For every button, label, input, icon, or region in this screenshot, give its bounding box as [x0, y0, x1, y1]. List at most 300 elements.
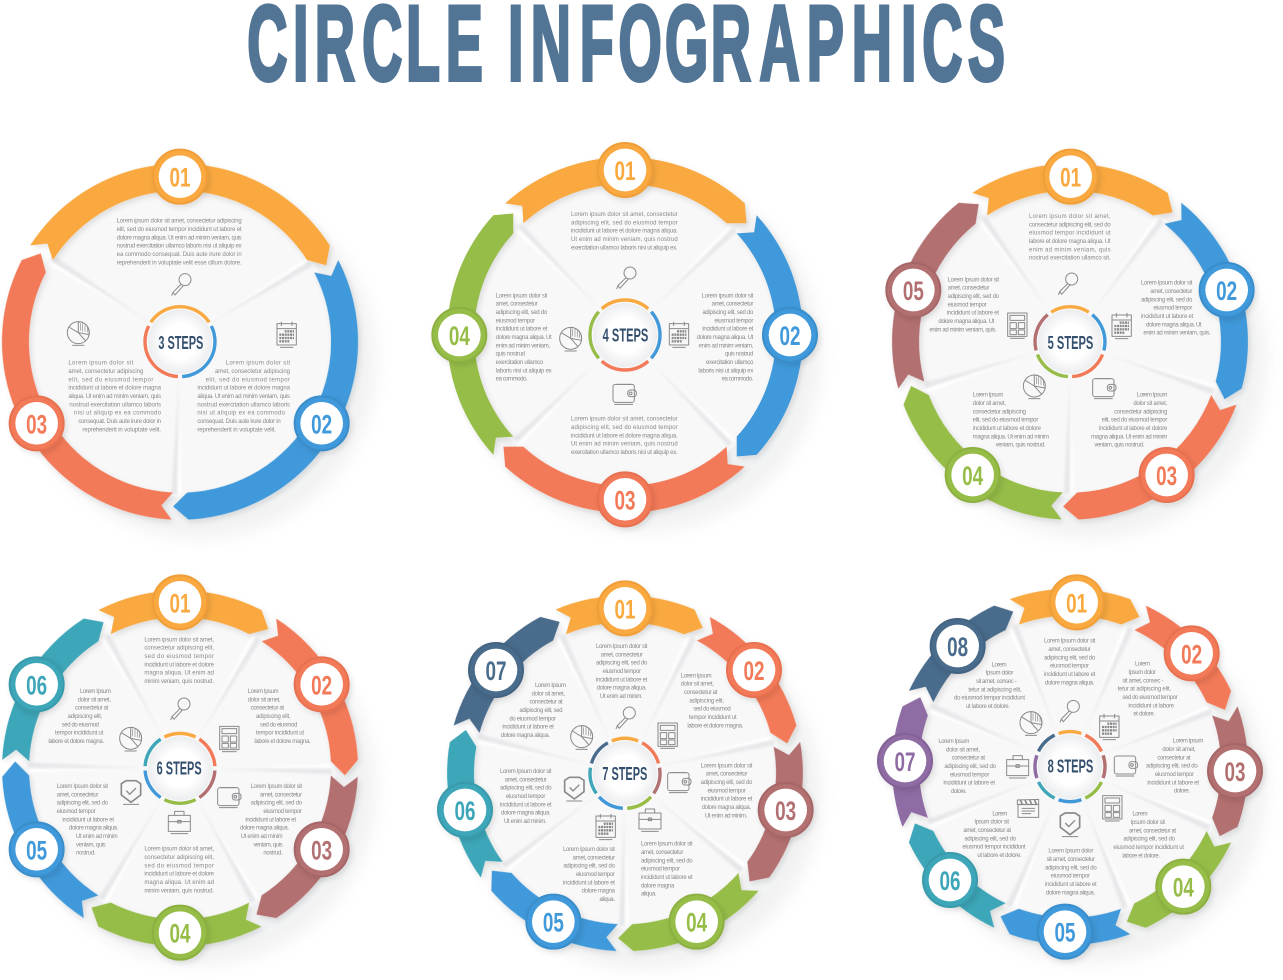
body text: step 02: eiusmod tempor	[714, 318, 753, 324]
body text: step 03: nostrud exercitation ullamco laboris	[69, 402, 161, 408]
badge 04: 04	[169, 919, 191, 949]
body text: step 07: incididunt ut labore et	[943, 781, 995, 787]
body text: step 02	[248, 689, 311, 745]
panel: 3 steps circle	[0, 150, 409, 560]
body text: step 04: adipiscing elit, sed do	[496, 310, 548, 316]
body text: step 07: dolor sit amet,	[532, 691, 565, 697]
body text: step 01: eiusmod tempor	[1050, 664, 1089, 670]
arrow segment 03	[503, 447, 745, 513]
icon: calendar	[1112, 313, 1131, 339]
body text: step 08: ut labore et dolore.	[966, 704, 1010, 710]
center hub: 7 steps	[588, 738, 662, 811]
body text: step 06: sed do eiusmod	[62, 722, 99, 728]
badge 04: 04	[962, 461, 983, 491]
center hub: 7 steps: 7 STEPS	[602, 763, 647, 784]
badge 02	[1200, 263, 1254, 317]
body text: step 02: elit, sed do eiusmod tempor	[206, 377, 290, 383]
arrow segment 03	[743, 737, 814, 889]
badge 02	[295, 396, 349, 450]
body text: step 02: labore et dolore magna.	[687, 723, 744, 729]
body text: step 03: incididunt ut labore et	[1147, 780, 1199, 786]
body text: step 07: adipiscing elit, sed do	[944, 764, 997, 770]
body text: step 08: Ipsum dolor	[986, 671, 1013, 677]
body text: step 07: consectetur at	[529, 700, 563, 706]
body text: step 06: consectetur at	[75, 706, 109, 712]
body text: step 06: dolore magna aliqua.	[501, 811, 551, 817]
badge 02: 02	[311, 409, 332, 439]
body text: step 02: exercitation ullamco	[706, 360, 754, 366]
badge 03	[10, 396, 64, 450]
number badges	[438, 581, 813, 949]
body text: step 03: elit, sed do eiusmod tempor	[68, 377, 153, 383]
badge 03	[1208, 744, 1262, 798]
icon: pie chart	[571, 726, 593, 749]
body text: step 02: sed do eiusmod	[260, 722, 297, 728]
arrow segment 03	[1212, 706, 1248, 836]
arrow segment 02	[171, 250, 409, 560]
body text: step 04: eiusmod tempor	[496, 318, 535, 324]
body text: step 04: laboris nisi ut aliquip ex	[496, 368, 552, 374]
body text: step 03: eiusmod tempor	[1155, 772, 1194, 778]
badge 01: 01	[169, 588, 191, 618]
body text: step 01: amet, consectetur	[1048, 647, 1091, 653]
body text: step 07	[501, 683, 566, 739]
arrow segment 07	[443, 602, 565, 741]
body text: step 03: reprehenderit in voluptate velit.	[82, 427, 161, 433]
center hub: 8 steps: 8 STEPS	[1048, 755, 1093, 776]
body text: step 01	[117, 219, 242, 266]
body text: step 04: amet, consectetur	[641, 850, 683, 856]
body text: step 03: amet, consectetur	[260, 792, 302, 798]
badge 01	[153, 150, 207, 204]
body text: step 02: tempor incididunt ut	[256, 731, 304, 737]
body text: step 05: adipiscing elit, sed do	[948, 294, 1000, 300]
body text: step 01: amet, consectetur	[601, 652, 643, 658]
badge 02	[295, 657, 349, 711]
body text: step 01: Ut enim ad minim.	[600, 694, 643, 700]
body text: step 06: Lorem	[992, 811, 1007, 817]
body text: step 06: tempor incididunt ut	[55, 731, 104, 737]
ring segments	[434, 595, 814, 967]
body text: step 05: Lorem Ipsum dolor sit	[57, 784, 108, 790]
body text: step 02: et dolore.	[1133, 712, 1155, 718]
arrow segment 01	[505, 157, 746, 223]
badge 03: 03	[614, 485, 635, 515]
arrow segment 04	[1121, 825, 1239, 942]
body text: step 01: reprehenderit in voluptate velit esse cillum dolore.	[117, 260, 242, 266]
body text: step 01: nostrud exercitation ullamco laboris nisi ut aliquip ex	[117, 244, 242, 250]
body text: step 01: Lorem Ipsum dolor sit	[596, 644, 648, 650]
body text: step 03: amet, consectetur adipiscing	[68, 369, 143, 375]
body text: step 03: magna aliqua. Ut enim ad minim	[1091, 434, 1167, 440]
body text: step 02: incididunt ut labore et dolore magna	[197, 386, 291, 392]
body text: step 06: incididunt ut labore et	[500, 802, 552, 808]
arrow segment 02	[1160, 194, 1271, 400]
badge 05: 05	[543, 908, 564, 938]
panel: 7 steps circle	[434, 581, 822, 970]
badge 03	[598, 472, 652, 526]
body text: step 04: elit, sed do eiusmod tempor	[973, 418, 1038, 424]
badge 01: 01	[169, 163, 191, 193]
arrow segment 04	[882, 384, 1075, 543]
badge 04	[432, 308, 486, 362]
icon: shield	[1060, 813, 1080, 837]
badge 07	[469, 643, 523, 697]
body text: step 01: magna aliqua. Ut enim ad	[144, 671, 214, 677]
arrow segment 06	[0, 603, 108, 772]
body text: step 05: amet, consectetur	[948, 286, 989, 292]
body text: step 04: eiusmod tempor	[641, 867, 680, 873]
body text: step 03: Lorem Ipsum dolor sit	[251, 784, 302, 790]
body text: step 04: Lorem ipsum dolor sit amet,	[144, 847, 214, 853]
body text: step 04: adipiscing elit, sed do	[641, 858, 693, 864]
body text: step 05: amet, consectetur	[57, 792, 98, 798]
panel: 4 steps circle	[432, 143, 822, 532]
icon: briefcase	[1007, 756, 1029, 778]
body text: step 03: consectetur at	[1157, 755, 1191, 761]
body text: step 02: amet, consectetur adipiscing	[215, 369, 290, 375]
body text: step 03: aliqua. Ut enim ad minim veniam, quis	[68, 394, 161, 400]
center hub: 6 steps	[142, 733, 218, 803]
body text: step 06: adipiscing elit, sed do	[500, 786, 552, 792]
badge 08: 08	[947, 632, 968, 662]
body text: step 02: laboris nisi ut aliquip ex	[698, 368, 753, 374]
body text: step 04	[144, 847, 215, 894]
body text: step 06: Lorem Ipsum	[80, 689, 111, 695]
body text: step 01: Lorem ipsum dolor sit amet, consectetur	[571, 212, 678, 218]
body text: step 07: dolore magna aliqua.	[501, 733, 550, 739]
ring segments	[0, 164, 409, 560]
icon: shield	[565, 777, 584, 801]
body text: step 01	[1029, 214, 1111, 262]
body text: step 05: incididunt ut labore et	[1045, 882, 1097, 888]
body text: step 02: dolor sit amet,	[248, 697, 281, 703]
body text: step 05: dolore magna aliqua. Ut	[938, 319, 995, 325]
body text: step 01: enim ad minim veniam, quis	[1029, 247, 1111, 253]
icon: magnifier	[1058, 273, 1078, 295]
badge 06	[438, 783, 492, 837]
body text: step 04: quis nostrud	[496, 352, 525, 358]
body text: step 02: amet, consectetur	[712, 302, 753, 308]
body text: step 07: incididunt ut labore et	[502, 725, 554, 731]
body text: step 03	[1091, 393, 1168, 449]
badge 04	[670, 895, 724, 949]
panel: 8 steps circle	[878, 575, 1267, 963]
body text: step 06: amet, consectetur	[505, 777, 547, 783]
body text: step 05: incididunt ut labore et	[62, 817, 114, 823]
body text: step 02: dolore magna aliqua. Ut	[1146, 322, 1202, 328]
body text: step 06: eiusmod tempor	[506, 794, 545, 800]
icon: calculator	[658, 723, 677, 748]
body text: step 05: adipiscing elit, sed do	[563, 864, 616, 870]
badge 05	[10, 822, 64, 876]
body text: step 02: incididunt ut labore et	[702, 327, 754, 333]
body text: step 04: minim veniam, quis nostrud.	[144, 888, 214, 894]
body text: step 05: adipiscing elit, sed do	[1045, 865, 1097, 871]
badge 03: 03	[1156, 461, 1177, 491]
body text: step 02: reprehenderit in voluptate velit.	[197, 427, 276, 433]
body text: step 02	[197, 361, 291, 433]
body text: step 01: Lorem ipsum dolor sit amet, consectetur adipiscing	[117, 219, 242, 225]
body text: step 02: enim ad minim veniam,	[699, 343, 754, 349]
body text: step 08: tetur at adipiscing elit,	[968, 687, 1022, 693]
badge 05	[526, 895, 580, 949]
number badges	[878, 575, 1262, 959]
badge 04: 04	[449, 321, 470, 351]
arrow segment 05	[478, 865, 627, 964]
body text: step 02: Ipsum dolor	[1128, 670, 1156, 676]
icon: calendar	[596, 814, 615, 840]
body text: step 03: nisi ut aliquip ex ea commodo	[74, 411, 162, 417]
number badges	[10, 150, 349, 450]
body text: step 01: adipiscing elit, sed do eiusmod tempor	[571, 220, 678, 226]
icon: wallet	[218, 788, 241, 808]
body text: step 02: Lorem Ipsum	[681, 673, 712, 679]
body text: step 02: Lorem Ipsum	[248, 689, 279, 695]
body text: step 03: eiusmod tempor	[707, 788, 746, 794]
body text: step 03: consectetur adipiscing	[1114, 409, 1167, 415]
body text: step 03: dolore magna aliqua.	[702, 805, 751, 811]
center hub: 5 steps: 5 STEPS	[1048, 332, 1093, 353]
body text: step 02: sed do eiusmod tempor	[1122, 695, 1178, 701]
body text: step 02: incididunt ut labore	[1128, 703, 1175, 709]
body text: step 05: incididunt ut labore et	[947, 311, 999, 317]
badge 01	[598, 581, 652, 635]
badge 01: 01	[1066, 588, 1087, 618]
body text: step 03	[240, 784, 303, 857]
body text: step 01: eiusmod tempor incididunt ut	[1029, 231, 1111, 237]
badge 02: 02	[779, 321, 800, 351]
body text: step 04: aliqua.	[641, 892, 657, 898]
body text: step 04: enim ad minim veniam,	[496, 343, 550, 349]
body text: step 02: consequat. Duis aute irure dolor in	[197, 419, 281, 425]
body text: step 01: elit, sed do eiusmod tempor incididunt ut labore et	[117, 227, 242, 233]
badge 04	[1156, 860, 1210, 914]
ring segments	[871, 164, 1271, 546]
icon: briefcase	[639, 809, 661, 831]
center hub: 8 steps	[1035, 732, 1105, 802]
arrow segment 01	[1010, 589, 1139, 625]
body text: step 03: Lorem Ipsum	[1173, 739, 1203, 745]
body text: step 07: dolor sit amet,	[946, 747, 980, 753]
body text: step 07: adipiscing elit, sed	[519, 708, 563, 714]
arrow segment 03	[252, 765, 375, 934]
body text: step 02: Lorem Ipsum dolor sit	[1141, 281, 1193, 287]
body text: step 02: consectetur at	[684, 690, 718, 696]
body text: step 04: incididunt ut labore et dolore	[973, 426, 1042, 432]
badge 03	[1140, 448, 1194, 502]
body text: step 03	[701, 763, 753, 819]
arrow segment 01	[98, 590, 268, 634]
badge 01: 01	[614, 594, 636, 624]
body text: step 01: Lorem ipsum dolor sit amet,	[144, 637, 214, 643]
body text: step 05: Ut enim ad minim	[76, 834, 118, 840]
icon: calculator	[1008, 313, 1027, 338]
body text: step 01: dolore magna aliqua.	[597, 686, 647, 692]
body text: step 06: Lorem Ipsum dolor sit	[500, 769, 552, 775]
body text: step 05: eiusmod tempor	[576, 872, 615, 878]
body text: step 03: Lorem Ipsum dolor sit	[701, 763, 753, 769]
body text: step 04: Lorem Ipsum dolor sit	[641, 842, 693, 848]
body text: step 04: veniam, quis nostrud.	[996, 443, 1046, 449]
arrow segment 02	[737, 215, 803, 456]
body text: step 04: incididunt ut labore et	[496, 327, 548, 333]
icon: clapperboard	[1017, 799, 1039, 817]
body text: step 03: Ut enim ad minim	[241, 834, 283, 840]
body text: step 02: tetur at adipiscing elit,	[1118, 687, 1171, 693]
body text: step 04: consectetur adipiscing	[973, 409, 1026, 415]
icon: magnifier	[172, 274, 191, 296]
arrow segment 02	[1128, 598, 1245, 715]
body text: step 01: incididunt ut labore et dolore	[144, 662, 215, 668]
body text: step 05: amet, consectetur	[573, 855, 615, 861]
badge 01: 01	[1060, 163, 1081, 193]
body text: step 01: incididunt ut labore et	[1044, 672, 1096, 678]
body text: step 04: Lorem ipsum dolor sit	[496, 293, 548, 299]
arrow segment 05	[0, 759, 105, 928]
body text: step 01: adipiscing elit, sed do	[1044, 655, 1096, 661]
body text: step 01: minim veniam, quis nostrud.	[144, 679, 214, 685]
body text: step 03: dolor sit amet,	[1133, 401, 1168, 407]
body text: step 03: nostrud.	[263, 851, 283, 857]
body text: step 06: adipiscing elit,	[68, 714, 103, 720]
body text: step 02: adipiscing elit, sed do	[1141, 297, 1193, 303]
body text: step 03: incididunt ut labore et dolore magna aliqua.	[571, 433, 678, 439]
body text: step 05: eiusmod tempor	[1051, 874, 1090, 880]
body text: step 03	[68, 361, 162, 433]
badge 03	[759, 783, 813, 837]
badge 05: 05	[26, 835, 47, 865]
icon: shield	[121, 781, 141, 804]
body text: step 04: Lorem	[1132, 812, 1148, 818]
badge 02: 02	[743, 656, 764, 686]
body text: step 05: enim ad minim veniam, quis.	[929, 327, 997, 333]
body text: step 05	[57, 784, 119, 857]
badge 06: 06	[454, 796, 475, 826]
body text: step 05: eiusmod tempor	[948, 302, 987, 308]
badge 06	[923, 853, 977, 907]
badge 02: 02	[1181, 639, 1202, 669]
body text: step 07: eiusmod tempor	[950, 772, 989, 778]
arrow segment 06	[895, 818, 1012, 935]
body text: step 03: Lorem Ipsum	[1137, 393, 1167, 399]
arrow segment 01	[555, 595, 703, 634]
icon: pie chart	[67, 322, 89, 345]
arrow segment 04	[92, 903, 262, 946]
center hub: 4 steps: 4 STEPS	[603, 325, 648, 346]
body text: step 08	[954, 662, 1025, 710]
icon: calendar	[1100, 714, 1119, 740]
body text: step 03: Lorem ipsum dolor sit amet, consectetur	[571, 417, 678, 423]
icon: wallet	[613, 384, 636, 404]
arrow segment 05	[871, 189, 982, 396]
body text: step 03: Lorem ipsum dolor sit	[68, 361, 134, 367]
body text: step 02: incididunt ut labore et	[1141, 314, 1194, 320]
body text: step 01: ea commodo consequat. Duis aute irure dolor in	[117, 252, 242, 258]
body text: step 01: consectetur adipiscing elit,	[144, 646, 214, 652]
body text: step 03: incididunt ut labore et	[245, 817, 296, 823]
badge 03: 03	[26, 409, 47, 439]
body text: step 04: consectetur adipiscing elit,	[144, 855, 214, 861]
body text: step 06: Ut enim ad minim.	[504, 819, 547, 825]
body text: step 04: dolor sit amet,	[973, 401, 1006, 407]
ring segments	[0, 590, 378, 946]
body text: step 05: eiusmod tempor	[57, 809, 96, 815]
body text: step 03: incididunt ut labore et dolore	[1099, 426, 1168, 432]
body text: step 05: Lorem Ipsum dolor	[1048, 849, 1093, 855]
body text: step 08: Lorem	[992, 662, 1007, 668]
body text: step 01: exercitation ullamco laboris nisi ut aliquip ex.	[571, 245, 678, 251]
badge 03: 03	[1224, 757, 1245, 787]
body text: step 02: adipiscing elit,	[689, 698, 724, 704]
body text: step 02: Lorem ipsum dolor sit	[226, 361, 290, 367]
body text: step 03: adipiscing elit, sed do	[1146, 764, 1198, 770]
icon: pie chart	[560, 327, 582, 351]
badge 02	[1165, 626, 1219, 680]
body text: step 01: dolore magna aliqua.	[1045, 680, 1095, 686]
body text: step 03: amet, consectetur	[706, 772, 747, 778]
badge 01	[153, 575, 207, 629]
icon: calculator	[220, 726, 239, 752]
body text: step 01	[1044, 639, 1096, 686]
body text: step 06: Ipsum dolor sit	[974, 820, 1009, 826]
body text: step 05: sit amet, consectetur	[1047, 857, 1095, 863]
arrow segment 01	[972, 164, 1172, 215]
body text: step 05	[929, 277, 1000, 333]
body text: step 05: dolore magna	[582, 889, 616, 895]
center hub: 5 steps	[1031, 307, 1109, 381]
body text: step 04: dolore magna	[641, 883, 675, 889]
arrow segment 08	[901, 592, 1019, 709]
body text: step 03	[1146, 739, 1203, 795]
body text: step 02	[681, 673, 744, 729]
badge 01	[1044, 150, 1098, 204]
number badges	[10, 575, 349, 960]
panel: 5 steps circle	[871, 150, 1271, 546]
number badges	[886, 150, 1254, 502]
badge 01: 01	[614, 156, 636, 186]
icon: wallet	[1093, 379, 1116, 399]
body text: step 01: incididunt ut labore et dolore magna aliqua.	[571, 229, 678, 235]
body text: step 03: Ut enim ad minim veniam, quis nostrud	[571, 442, 678, 448]
body text: step 06: amet, consectetur at	[963, 828, 1011, 834]
body text: step 04: ea commodo.	[496, 377, 528, 383]
body text: step 05: dolore magna aliqua.	[69, 826, 119, 832]
body text: step 01	[571, 212, 678, 251]
icon: calculator	[1103, 796, 1122, 821]
body text: step 01: adipiscing elit, sed do	[596, 661, 648, 667]
body text: step 03: eiusmod tempor	[263, 809, 302, 815]
body text: step 06: eiusmod tempor incididunt	[962, 845, 1026, 851]
body text: step 02: ea commodo.	[722, 377, 754, 383]
body text: step 02: aliqua. Ut enim ad minim veniam, quis	[197, 394, 290, 400]
icon: magnifier	[617, 267, 636, 289]
arrow segment 03	[1061, 386, 1254, 546]
body text: step 03: dolore magna aliqua.	[240, 826, 289, 832]
body text: step 05: Lorem Ipsum dolor sit	[948, 277, 999, 283]
body text: step 03: consequat. Duis aute irure dolor in	[78, 419, 161, 425]
body text: step 03: elit, sed do eiusmod tempor	[1102, 418, 1167, 424]
body text: step 01: nostrud exercitation ullamco sit.	[1029, 256, 1111, 262]
body text: step 05	[1045, 849, 1097, 896]
body text: step 05: veniam, quis	[76, 842, 106, 848]
body text: step 01	[144, 637, 215, 685]
body text: step 07	[938, 739, 997, 795]
body text: step 05: Lorem Ipsum dolor sit	[563, 847, 615, 853]
badge 06: 06	[939, 866, 960, 896]
body text: step 02: adipiscing elit,	[256, 714, 291, 720]
body text: step 06	[48, 689, 111, 745]
